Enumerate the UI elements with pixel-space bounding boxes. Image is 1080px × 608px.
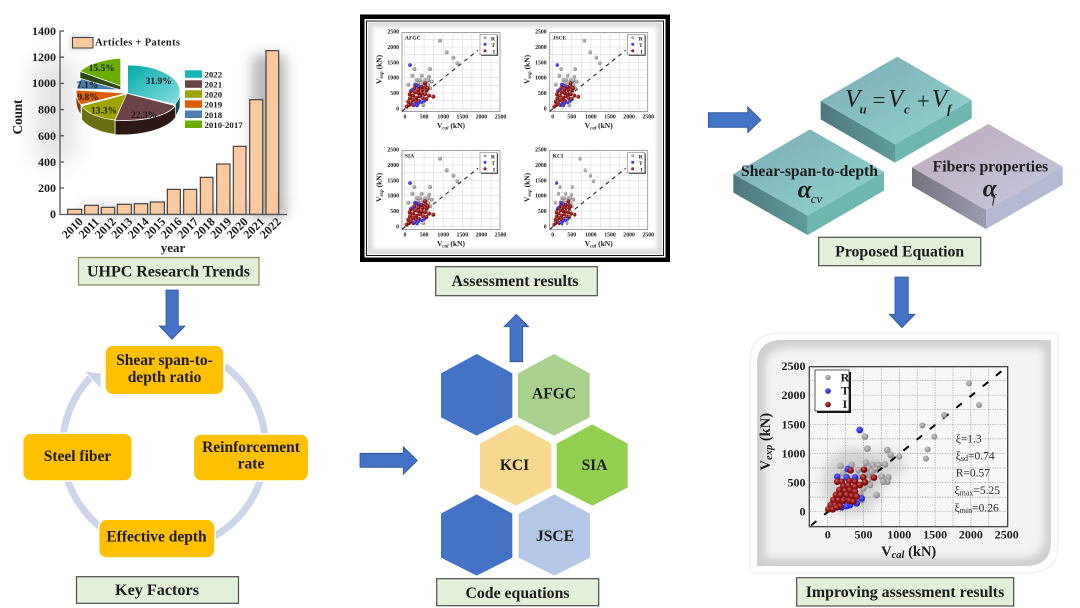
plot: AFGC: V <box>375 79 384 84</box>
y axis numbers <box>782 359 806 519</box>
panel: code equation hexagons <box>441 354 628 576</box>
x axis years: 2022 <box>257 215 284 241</box>
plot: SIA: R <box>491 154 496 160</box>
plot: AFGC: 0 <box>404 115 407 121</box>
plot: AFGC <box>375 30 506 131</box>
plot: KCI: 2000 <box>535 163 547 169</box>
plot: SIA: (kN) <box>449 239 465 248</box>
plot: AFGC: R <box>491 36 496 42</box>
plot: KCI: 0 <box>544 224 547 230</box>
plot: KCI: V <box>585 239 590 248</box>
plot: KCI: cal <box>590 244 597 249</box>
x axis numbers: 1000 <box>887 528 911 542</box>
pie legend: 2020 <box>204 90 223 100</box>
plot: AFGC: 2500 <box>387 30 399 36</box>
block: fibers properties factor: Fibers properties <box>933 159 1048 176</box>
statistics: ξ <box>954 485 960 497</box>
arrow: key factors to code equations <box>360 447 417 474</box>
factor: reinforcement rate: rate <box>238 456 264 472</box>
pie legend <box>185 70 243 130</box>
x axis years: 2013 <box>108 215 135 241</box>
plot: KCI: T <box>639 161 643 167</box>
plot legend R T I: I <box>843 397 848 411</box>
hexagon: KCI <box>480 424 551 506</box>
pie chart: publication share <box>76 58 180 135</box>
hexagon: blue upper <box>441 354 512 436</box>
x axis years: 2019 <box>207 215 234 241</box>
statistics: =0.74 <box>968 450 995 462</box>
pie legend: 2021 <box>204 80 222 90</box>
plot: AFGC: 500 <box>420 115 429 121</box>
block: shear-span-to-depth factor: Shear-span-to-depth <box>741 163 878 180</box>
plot: KCI: 2000 <box>623 233 635 239</box>
x axis years: 2017 <box>174 215 201 241</box>
x axis numbers: 500 <box>854 528 872 542</box>
axis title: year: year <box>161 240 185 255</box>
statistics: =5.25 <box>973 485 1000 497</box>
y axis numbers: 1000 <box>782 446 806 460</box>
block: fibers properties factor <box>912 124 1063 229</box>
bar chart: yearly counts <box>68 51 279 214</box>
axis title: Count: Count <box>10 99 25 134</box>
y axis numbers: 2000 <box>782 388 806 402</box>
factor: steel fiber <box>23 433 132 481</box>
pie percentages: 31.9% <box>146 77 172 87</box>
plot: JSCE: 2500 <box>642 115 654 121</box>
plot: SIA: cal <box>442 244 449 249</box>
panel: proposed equation blocks <box>733 57 1063 235</box>
plot: SIA: SIA <box>405 153 414 159</box>
y axis numbers: 400 <box>38 155 56 169</box>
block: shear strength equation: f <box>947 101 953 116</box>
x axis years: 2010 <box>59 215 86 241</box>
heading: Key Factors: Key Factors <box>115 582 199 599</box>
arrow: trends to key factors <box>159 290 185 339</box>
heading: Proposed Equation: Proposed Equation <box>835 244 965 260</box>
pie legend: 2019 <box>204 100 223 110</box>
y axis numbers: 500 <box>788 476 806 490</box>
plot: KCI: KCI <box>553 153 563 159</box>
block: shear strength equation <box>821 57 972 163</box>
plot: SIA: 2000 <box>476 233 487 239</box>
hexagon: SIA <box>557 424 628 506</box>
plot: JSCE: exp <box>528 71 533 79</box>
hexagon: JSCE <box>519 494 590 576</box>
block: fibers properties factor: f <box>992 191 998 206</box>
plot: AFGC: (kN) <box>449 121 465 130</box>
hexagon: AFGC: AFGC <box>532 386 576 402</box>
plot: JSCE: (kN) <box>596 121 613 130</box>
block: shear-span-to-depth factor: cv <box>811 191 822 206</box>
heading: Code equations <box>437 579 599 606</box>
block: shear strength equation: V <box>932 86 950 113</box>
x axis years: 2016 <box>158 215 185 241</box>
panel: assessment results frame with four plots <box>360 14 670 262</box>
plot: SIA: 1000 <box>387 194 399 200</box>
heading: UHPC Research Trends <box>78 258 259 285</box>
plot: JSCE: 1500 <box>535 60 547 66</box>
plot: KCI: (kN) <box>596 239 613 248</box>
plot area and grid <box>809 367 1008 527</box>
heading: Improving assessment results <box>797 578 1014 606</box>
y axis numbers <box>32 24 56 221</box>
block: fibers properties factor: α <box>983 176 998 203</box>
plot: AFGC: 500 <box>390 91 399 97</box>
heading: Key Factors <box>76 577 238 603</box>
diagonal reference line <box>811 367 1007 526</box>
y axis numbers: 800 <box>38 102 56 116</box>
plot legend R T I: T <box>841 384 849 398</box>
plot: AFGC: 2500 <box>495 115 506 121</box>
hexagon: KCI: KCI <box>500 457 529 474</box>
plot: KCI: 1000 <box>585 233 597 239</box>
y axis numbers: 600 <box>38 129 56 143</box>
plot: SIA <box>375 148 506 249</box>
arrow: proposed equation to improved results <box>889 277 915 328</box>
factor: steel fiber: Steel fiber <box>44 448 111 465</box>
plot: SIA: T <box>491 161 495 167</box>
plot: KCI: (kN) <box>522 172 531 189</box>
plot: KCI: 500 <box>538 209 547 215</box>
axis title: V cal: (kN) <box>904 544 936 560</box>
x axis years: 2018 <box>191 215 218 241</box>
arrow: assessment results to proposed equation <box>708 107 761 133</box>
heading: Assessment results: Assessment results <box>452 273 578 290</box>
pie legend: 2018 <box>204 110 223 120</box>
axis title: V exp: (kN) <box>758 413 774 445</box>
plot: SIA: V <box>375 197 384 202</box>
factor: shear span-to-depth ratio: depth ratio <box>128 369 202 386</box>
plot: SIA: 500 <box>420 233 429 239</box>
plot: KCI: 1500 <box>535 178 547 184</box>
plot: AFGC: 0 <box>396 106 399 112</box>
plot: SIA: 500 <box>390 209 399 215</box>
block: shear strength equation: V <box>845 86 863 113</box>
plot: KCI: exp <box>528 189 533 197</box>
plot: SIA: I <box>493 167 495 173</box>
plot: JSCE: T <box>639 43 643 49</box>
plot: KCI: 2500 <box>642 233 654 239</box>
pie legend: 2010-2017 <box>204 120 243 130</box>
hexagon: blue lower <box>441 494 512 576</box>
heading: Assessment results <box>436 267 597 296</box>
plot: JSCE: 2000 <box>623 115 635 121</box>
arrow: code equations up to assessment results <box>504 314 529 362</box>
plot: JSCE: 1000 <box>585 115 597 121</box>
factor: shear span-to-depth ratio <box>105 345 224 395</box>
block: shear strength equation: c <box>904 101 910 116</box>
cycle ring with arrowhead <box>62 366 266 549</box>
plot: JSCE: R <box>639 36 644 42</box>
plot: JSCE: JSCE <box>553 35 566 41</box>
plot: JSCE: I <box>641 49 643 55</box>
plot: AFGC: 2000 <box>476 115 487 121</box>
plot: AFGC: (kN) <box>375 54 384 71</box>
x axis years: 2012 <box>92 215 119 241</box>
factor: effective depth: Effective depth <box>106 528 207 546</box>
x axis numbers: 2000 <box>959 528 983 542</box>
statistics: ξ <box>956 450 961 462</box>
pie percentages: 15.5% <box>89 64 115 74</box>
panel: key factors cycle <box>23 345 309 558</box>
x axis years: 2015 <box>141 215 168 241</box>
plot: AFGC: T <box>491 43 495 49</box>
x axis numbers: 2500 <box>995 528 1019 542</box>
statistics: R=0.57 <box>956 468 990 480</box>
plot: JSCE: V <box>585 121 590 130</box>
plot: SIA: 1500 <box>457 233 468 239</box>
pie percentages <box>77 64 172 121</box>
pie percentages: 13.3% <box>91 106 117 116</box>
plot: JSCE: 2000 <box>535 45 547 51</box>
scatter: cluster points <box>825 427 894 513</box>
plot: JSCE: (kN) <box>522 54 531 71</box>
plot: SIA: V <box>437 239 442 248</box>
heading: Code equations: Code equations <box>466 585 570 602</box>
plot: AFGC: 1000 <box>387 76 399 82</box>
block: shear strength equation: u <box>860 101 867 116</box>
plot: KCI: 1000 <box>535 194 547 200</box>
statistics: ξ=1.3 <box>956 433 982 445</box>
heading: Proposed Equation <box>819 237 981 266</box>
plot: JSCE: V <box>522 79 531 84</box>
x axis years: 2011 <box>76 215 102 241</box>
plot: KCI: V <box>522 197 531 202</box>
plot: AFGC: 1500 <box>457 115 468 121</box>
plot: AFGC: 1500 <box>387 60 399 66</box>
statistics <box>954 433 1000 515</box>
panel: improving assessment results plot <box>750 333 1058 573</box>
plot: SIA: (kN) <box>375 172 384 189</box>
y axis numbers: 1000 <box>32 76 56 90</box>
block: shear-span-to-depth factor: α <box>798 177 813 204</box>
plot: SIA: exp <box>380 189 385 197</box>
plot legend R T I: R <box>841 370 850 384</box>
plot: JSCE: 0 <box>551 115 554 121</box>
plot: AFGC: AFGC <box>405 35 421 41</box>
plot: JSCE: 1500 <box>604 115 616 121</box>
hexagon: JSCE: JSCE <box>536 528 574 545</box>
chart legend: Articles + Patents: Articles + Patents <box>95 38 180 48</box>
scatter: upper gray points <box>896 380 982 462</box>
x axis numbers <box>825 528 1019 542</box>
plot: JSCE: 500 <box>538 91 547 97</box>
plot legend R T I <box>815 370 851 413</box>
axis title: V cal: V <box>881 544 892 560</box>
plot: SIA: 1500 <box>387 178 399 184</box>
heading: Improving assessment results: Improving assessment results <box>806 584 1004 601</box>
plot: KCI: I <box>641 167 643 173</box>
y axis numbers: 200 <box>38 181 56 195</box>
y axis numbers: 1400 <box>32 24 56 38</box>
hexagon: SIA: SIA <box>582 457 608 474</box>
block: shear-span-to-depth factor <box>733 129 884 235</box>
plot: KCI: 500 <box>567 233 576 239</box>
plot: KCI: R <box>639 154 644 160</box>
axis title: V cal: cal <box>892 550 905 561</box>
pie percentages: 22.3% <box>131 111 157 121</box>
statistics: min <box>960 506 972 515</box>
hexagon: AFGC <box>518 354 590 436</box>
y axis numbers: 0 <box>800 505 806 519</box>
pie percentages: 9.8% <box>77 93 99 103</box>
plot: KCI: 2500 <box>535 148 547 154</box>
panel: UHPC research trends chart <box>10 24 287 255</box>
pie legend: 2022 <box>204 70 223 80</box>
y axis numbers: 1500 <box>782 417 806 431</box>
plot: JSCE <box>522 30 654 131</box>
statistics: max <box>960 488 973 498</box>
plot: JSCE: 1000 <box>535 76 547 82</box>
factor: effective depth <box>99 519 215 558</box>
plot: AFGC: V <box>437 121 442 130</box>
plot: SIA: 2000 <box>387 163 399 169</box>
statistics: sd <box>961 454 968 463</box>
plot: KCI: 1500 <box>604 233 616 239</box>
block: shear strength equation: V <box>888 86 906 113</box>
plot: SIA: 2500 <box>495 233 506 239</box>
block: shear strength equation: + <box>917 88 930 114</box>
y axis numbers: 1200 <box>32 50 56 64</box>
plot: KCI: 0 <box>551 233 554 239</box>
plot: KCI <box>522 148 654 249</box>
plot: SIA: 0 <box>404 233 407 239</box>
x axis numbers: 1500 <box>923 528 947 542</box>
y axis numbers: 2500 <box>782 359 806 373</box>
axis title: V exp: exp <box>764 445 775 460</box>
x axis numbers: 0 <box>825 528 831 542</box>
plot: AFGC: cal <box>442 126 449 131</box>
plot: SIA: 0 <box>396 224 399 230</box>
x axis years <box>59 215 284 241</box>
statistics: ξ <box>954 503 960 515</box>
plot: JSCE: 2500 <box>535 30 547 36</box>
factor: reinforcement rate: Reinforcement <box>202 439 301 456</box>
plot: AFGC: 1000 <box>437 115 449 121</box>
factor: shear span-to-depth ratio: Shear span-to- <box>116 352 213 369</box>
plot: JSCE: 0 <box>544 106 547 112</box>
factor: reinforcement rate <box>193 434 309 481</box>
statistics: =0.26 <box>972 503 999 515</box>
block: shear strength equation: = <box>872 88 885 112</box>
plot: SIA: 1000 <box>437 233 449 239</box>
y axis numbers: 0 <box>50 207 56 221</box>
x axis years: 2021 <box>240 215 267 241</box>
x axis years: 2014 <box>125 215 152 241</box>
plot: AFGC: exp <box>380 71 385 79</box>
heading: UHPC Research Trends: UHPC Research Trends <box>87 264 250 280</box>
plot: JSCE: cal <box>590 126 597 131</box>
plot: AFGC: I <box>493 49 495 55</box>
plot: JSCE: 500 <box>567 115 576 121</box>
axis title: V exp: V <box>758 460 774 470</box>
x axis years: 2020 <box>224 215 251 241</box>
plot: SIA: 2500 <box>387 148 399 154</box>
pie percentages: 7.1% <box>77 81 98 91</box>
plot: AFGC: 2000 <box>387 45 399 51</box>
